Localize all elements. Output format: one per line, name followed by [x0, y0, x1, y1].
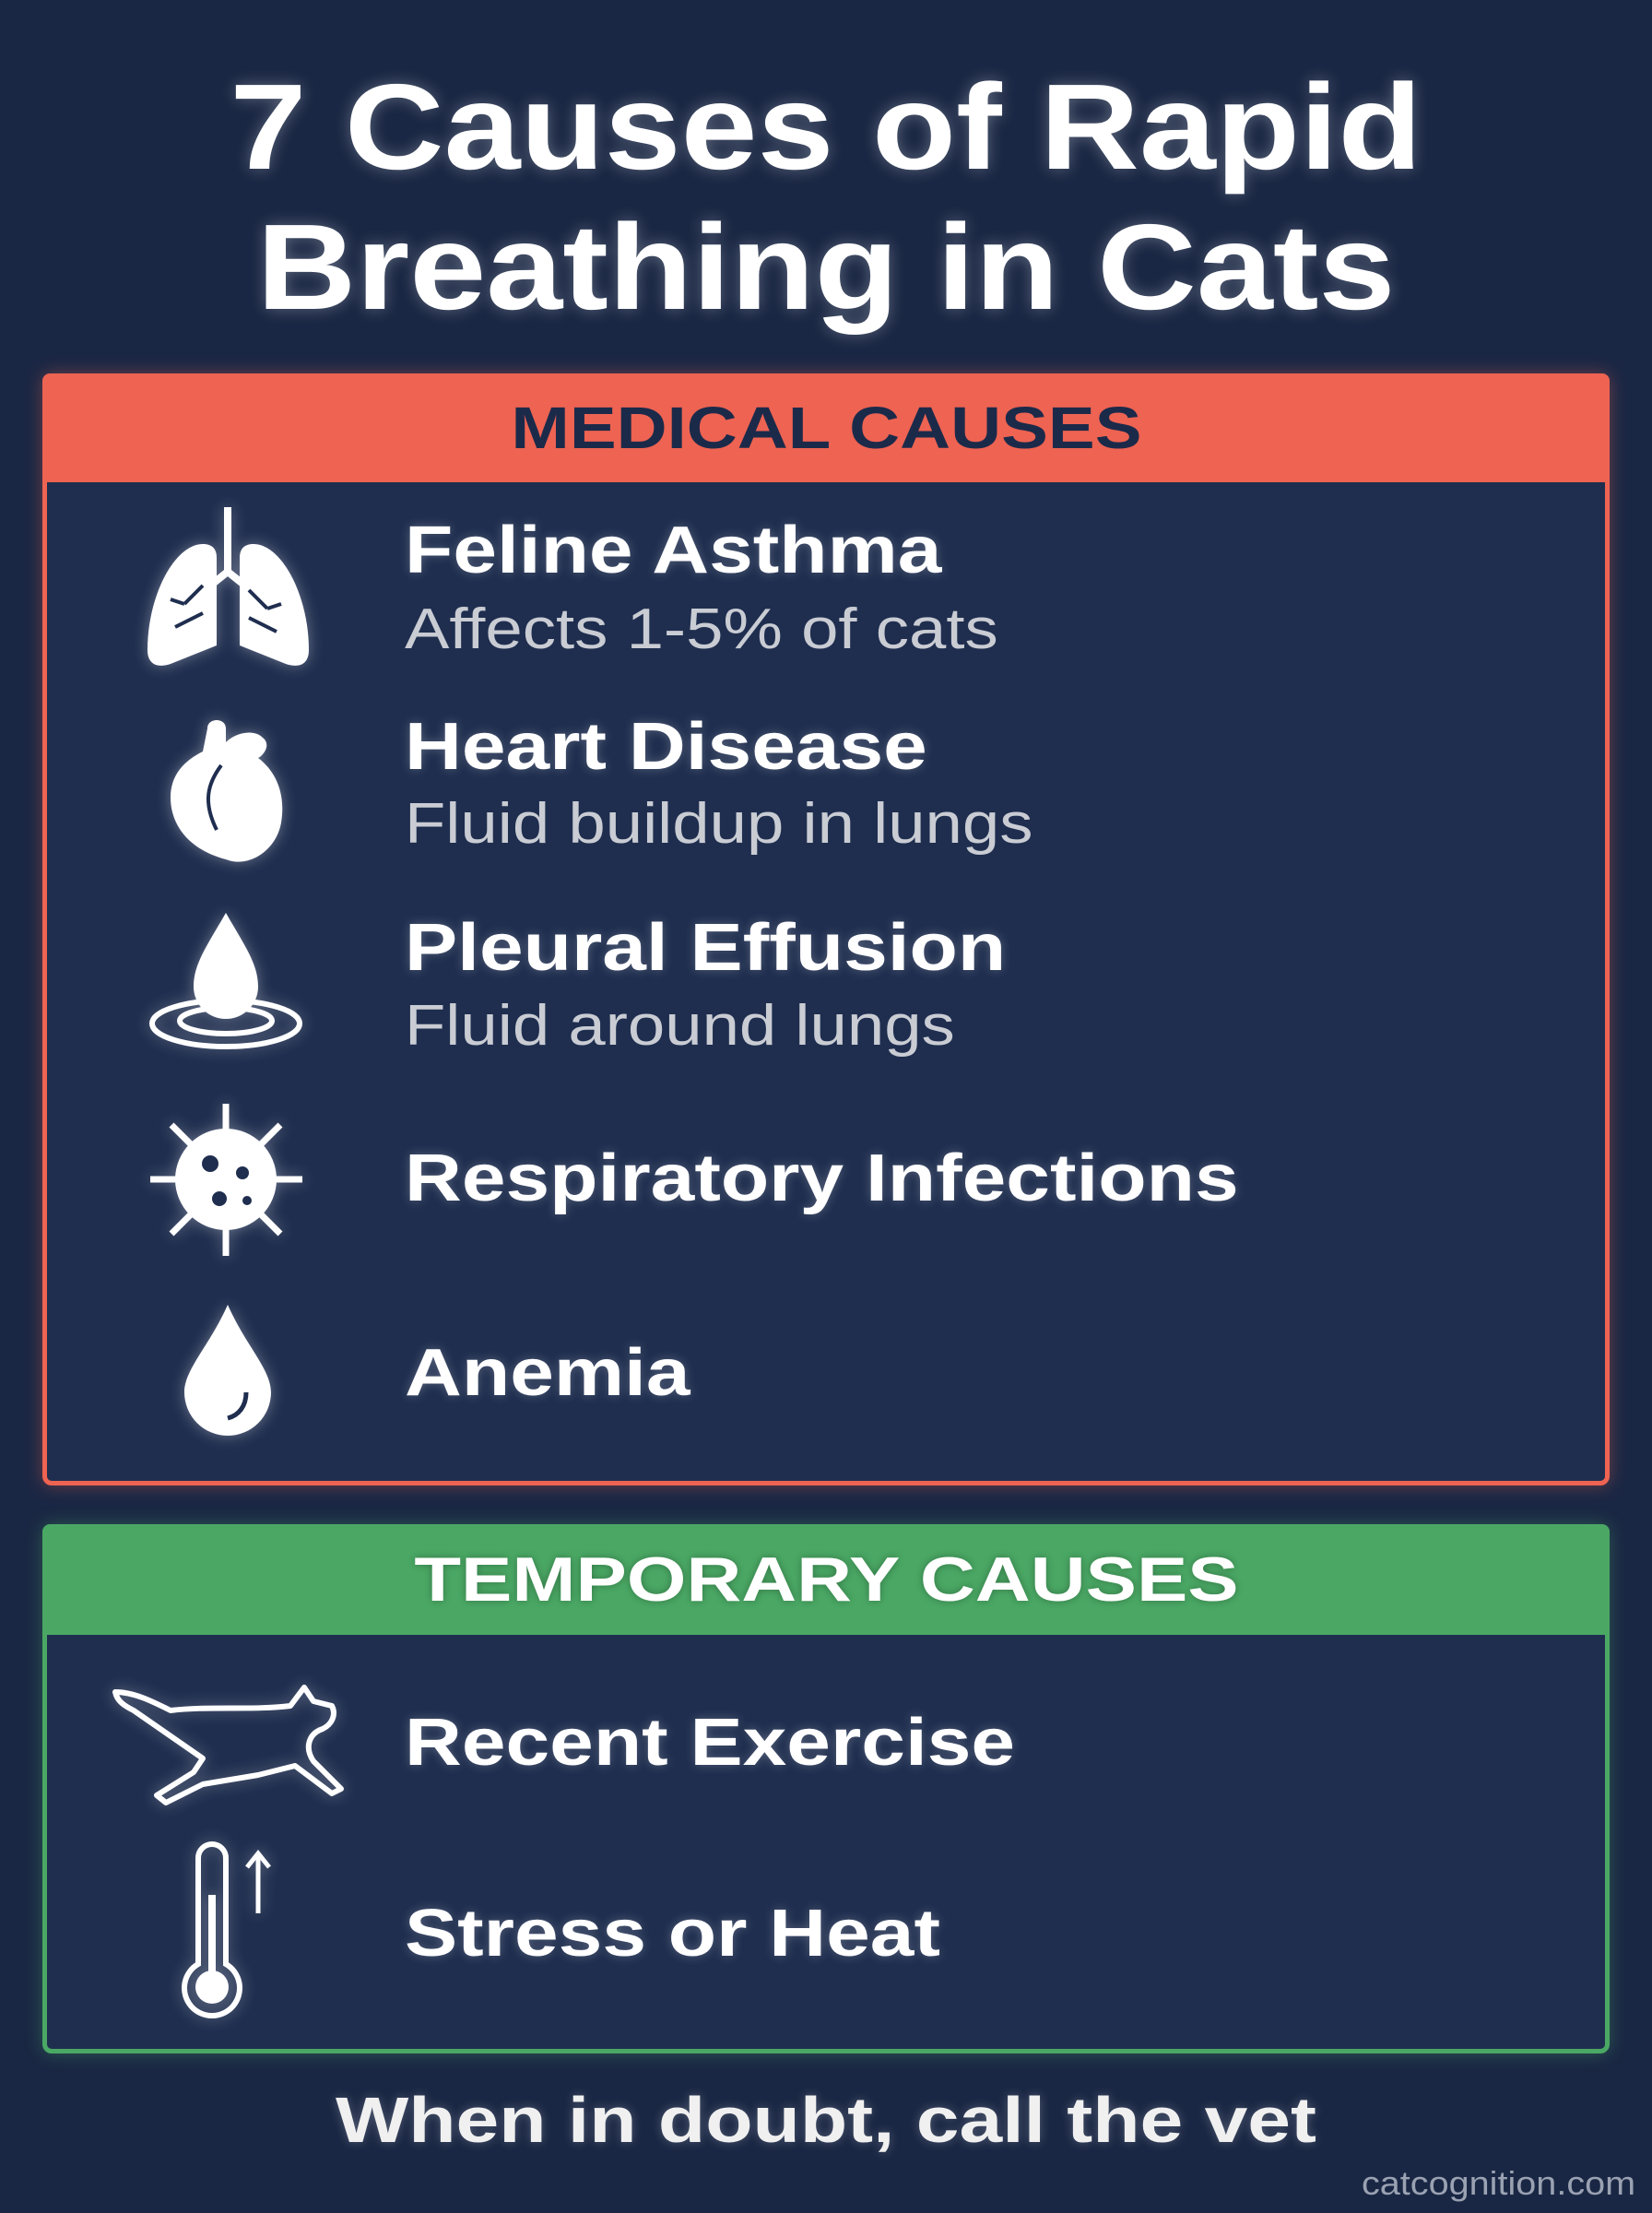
panel: medical causes — [42, 373, 1610, 1485]
text: Affects 1-5% of cats — [405, 598, 998, 661]
title — [230, 59, 1422, 343]
text: pleural effusion: Pleural Effusion — [405, 911, 1006, 985]
icon: lungs — [139, 503, 317, 673]
icon: thermometer — [175, 1835, 273, 2025]
title: 7 Causes of Rapid — [230, 59, 1422, 195]
text: recent exercise: Recent Exercise — [405, 1706, 1015, 1780]
icon: virus — [148, 1101, 305, 1259]
text: Fluid around lungs — [405, 994, 955, 1058]
icon: pleural effusion — [144, 911, 308, 1057]
title: Breathing in Cats — [257, 199, 1395, 335]
text: anemia: Anemia — [405, 1336, 690, 1410]
icon: heart — [162, 714, 290, 870]
icon: blood drop — [177, 1304, 278, 1444]
temporary header — [42, 1524, 1610, 1635]
icon: running cat — [107, 1681, 348, 1811]
text: respiratory infections: Respiratory Infections — [405, 1142, 1239, 1215]
text: feline asthma: Feline Asthma — [405, 514, 941, 587]
footer: When in doubt, call the vet — [336, 2084, 1316, 2156]
text: Fluid buildup in lungs — [405, 792, 1033, 856]
panel: temporary causes — [42, 1524, 1610, 2053]
source: catcognition.com — [1362, 2164, 1635, 2202]
medical header: MEDICAL CAUSES — [511, 395, 1141, 461]
temporary header: TEMPORARY CAUSES — [414, 1544, 1238, 1615]
text: heart disease: Heart Disease — [405, 710, 927, 784]
text: stress or heat: Stress or Heat — [405, 1897, 940, 1970]
medical header — [42, 373, 1610, 482]
